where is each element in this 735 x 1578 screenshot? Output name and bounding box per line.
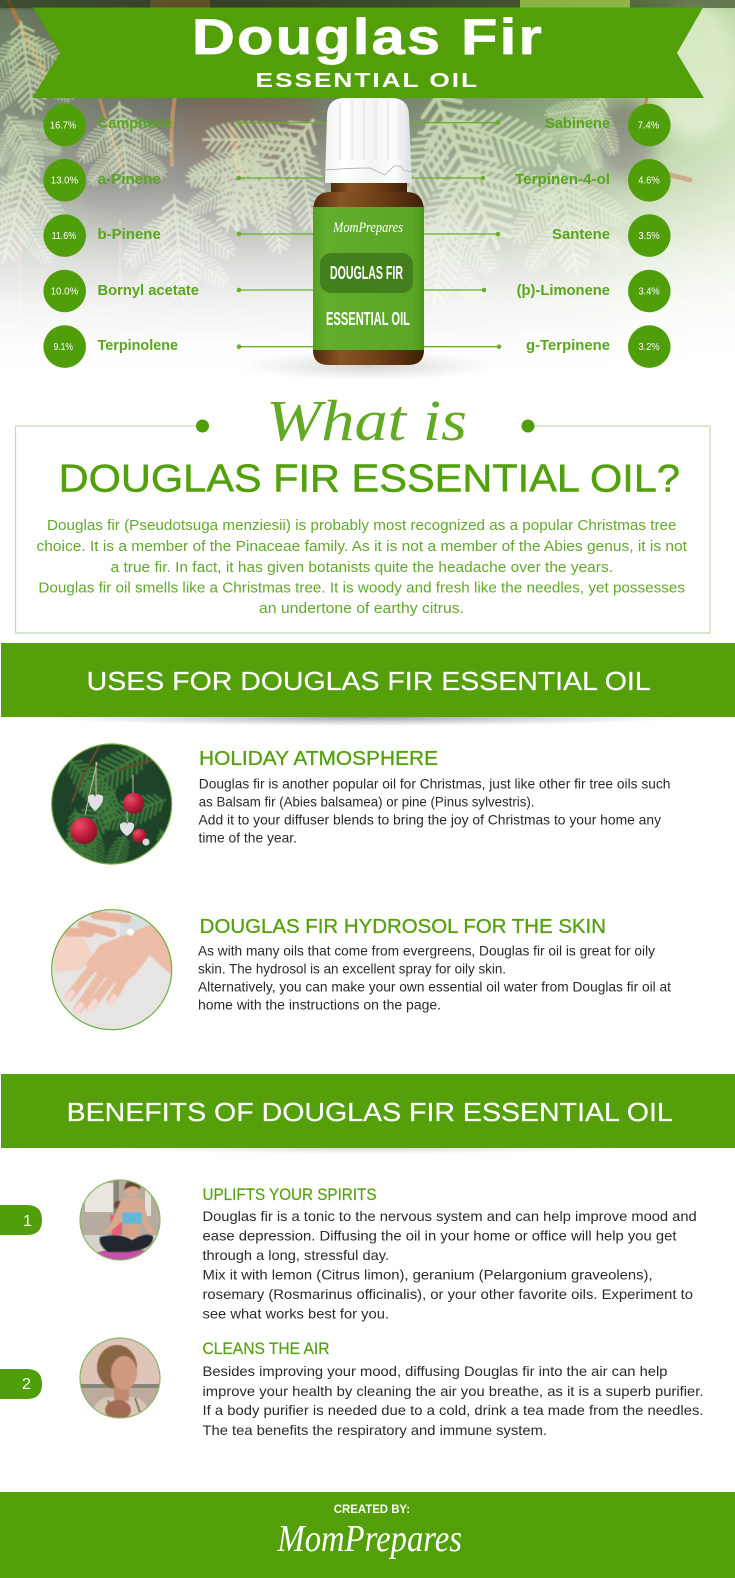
photo: christmas baubles on fir bbox=[52, 744, 172, 864]
text: hydrosol: skin. The hydrosol is an excellent spray for oily skin. bbox=[198, 961, 506, 977]
text: holiday atmosphere bbox=[198, 775, 670, 845]
left compounds list: 9.1% bbox=[54, 341, 73, 353]
number tab 2: 2 bbox=[22, 1376, 31, 1393]
intro paragraph: a true fir. In fact, it has given botanists quite the headache over the years. bbox=[111, 559, 613, 576]
text: uplifts your spirits bbox=[202, 1208, 697, 1322]
text: holiday atmosphere: Douglas fir is another popular oil for Christmas, just like other fir tree oils such bbox=[199, 775, 670, 791]
bottle label: Essential Oil: ESSENTIAL OIL bbox=[326, 308, 410, 329]
text: uplifts your spirits: rosemary (Rosmarinus officinalis), or your other favorite oils. Experiment to bbox=[202, 1286, 693, 1302]
photo ring: christmas bbox=[52, 744, 172, 864]
right compounds list: 3.4% bbox=[638, 286, 660, 298]
text: cleans the air: The tea benefits the respiratory and immune system. bbox=[202, 1422, 547, 1438]
right compounds list: 4.6% bbox=[638, 174, 660, 186]
heading: Douglas Fir Essential Oil?: DOUGLAS FIR ESSENTIAL OIL? bbox=[59, 458, 680, 501]
bottle cap bbox=[325, 98, 412, 183]
number tab 2 bbox=[0, 1369, 42, 1399]
photo ring: woman bbox=[80, 1338, 160, 1418]
background photo: fir branches fading to white bbox=[0, 0, 735, 328]
intro paragraph: an undertone of earthy citrus. bbox=[259, 600, 464, 617]
text: hydrosol: home with the instructions on the page. bbox=[198, 997, 441, 1013]
footer: created by: CREATED BY: bbox=[334, 1502, 410, 1516]
right connector lines bbox=[405, 120, 501, 349]
photo: woman breathing bbox=[80, 1338, 160, 1418]
right compounds list: Santene bbox=[552, 226, 610, 243]
essential oil bottle bbox=[313, 98, 424, 365]
right compounds list: 3.2% bbox=[638, 341, 660, 353]
bottle shadow bbox=[238, 351, 498, 381]
text: uplifts your spirits: Douglas fir is a tonic to the nervous system and can help improve mood and bbox=[202, 1208, 697, 1224]
text: hydrosol: As with many oils that come from evergreens, Douglas fir oil is great for oily bbox=[198, 943, 655, 959]
heading: cleans the air: CLEANS THE AIR bbox=[202, 1340, 330, 1358]
intro paragraph: Douglas fir (Pseudotsuga menziesii) is probably most recognized as a popular Christmas tree bbox=[47, 517, 676, 534]
text: cleans the air: Besides improving your mood, diffusing Douglas fir into the air can help bbox=[202, 1363, 668, 1379]
intro paragraph: Douglas fir oil smells like a Christmas tree. It is woody and fresh like the needles, yet possesses bbox=[38, 580, 685, 596]
section band: uses: USES FOR DOUGLAS FIR ESSENTIAL OIL bbox=[87, 668, 651, 696]
left compounds list bbox=[43, 104, 199, 368]
right compounds list: Terpinen-4-ol bbox=[515, 171, 610, 188]
heading: uplifts your spirits: UPLIFTS YOUR SPIRITS bbox=[202, 1186, 376, 1204]
photo: yoga meditation bbox=[80, 1180, 160, 1260]
number tab 1 bbox=[0, 1205, 42, 1235]
right compounds list: 3.5% bbox=[638, 230, 660, 242]
bottle label: brand: MomPrepares bbox=[332, 220, 403, 236]
text: holiday atmosphere: time of the year. bbox=[198, 829, 297, 845]
band shadow: benefits bbox=[97, 1142, 637, 1154]
text: holiday atmosphere: Add it to your diffuser blends to bring the joy of Christmas to your home any bbox=[198, 811, 661, 827]
left compounds list: 16.7% bbox=[50, 120, 76, 132]
photo ring: yoga bbox=[80, 1180, 160, 1260]
what-is box frame bbox=[16, 420, 710, 633]
subtitle: Essential Oil: ESSENTIAL OIL bbox=[256, 70, 479, 92]
text: uplifts your spirits: ease depression. Diffusing the oil in your home or office will help you get bbox=[202, 1228, 677, 1244]
top ribbon banner bbox=[32, 8, 704, 98]
left compounds list: 10.0% bbox=[51, 286, 78, 298]
band shadow: uses bbox=[42, 708, 692, 726]
photo: hands applying cream bbox=[50, 908, 176, 1032]
text: uplifts your spirits: Mix it with lemon (Citrus limon), geranium (Pelargonium graveolens), bbox=[202, 1266, 653, 1282]
bottle label: Douglas Fir plate bbox=[320, 253, 413, 293]
text: hydrosol: Alternatively, you can make your own essential oil water from Douglas fir oil at bbox=[198, 979, 671, 995]
left connector lines bbox=[237, 120, 330, 349]
left compounds list: a-Pinene bbox=[98, 171, 161, 188]
text: holiday atmosphere: as Balsam fir (Abies balsamea) or pine (Pinus sylvestris). bbox=[199, 793, 535, 809]
brown stems bbox=[8, 0, 690, 330]
text: cleans the air: improve your health by cleaning the air you breathe, as it is a superb purifier. bbox=[202, 1383, 704, 1399]
right compounds list: g-Terpinene bbox=[526, 337, 610, 354]
section band: benefits bbox=[1, 1074, 735, 1148]
footer band bbox=[0, 1492, 735, 1578]
right compounds list: (þ)-Limonene bbox=[517, 282, 610, 299]
intro paragraph bbox=[36, 517, 688, 617]
left compounds list: b-Pinene bbox=[98, 226, 161, 243]
text: uplifts your spirits: see what works best for you. bbox=[202, 1306, 389, 1322]
bottle label: Douglas Fir plate: DOUGLAS FIR bbox=[330, 263, 403, 283]
left compounds list: 11.6% bbox=[52, 230, 76, 242]
section band: uses bbox=[1, 643, 735, 717]
intro paragraph: choice. It is a member of the Pinaceae family. As it is not a member of the Abies genus, it is not bbox=[36, 538, 688, 555]
footer: brand name: MomPrepares bbox=[277, 1518, 462, 1560]
text: hydrosol bbox=[198, 943, 671, 1013]
photo ring: hands bbox=[52, 910, 172, 1030]
left compounds list: Camphene bbox=[98, 115, 172, 132]
heading: hydrosol: DOUGLAS FIR HYDROSOL FOR THE SKIN bbox=[200, 916, 606, 938]
script heading: What is: What is bbox=[266, 388, 467, 453]
title: Douglas Fir: Douglas Fir bbox=[192, 9, 544, 65]
right compounds list: Sabinene bbox=[545, 115, 610, 132]
text: cleans the air: If a body purifier is needed due to a cold, drink a tea made from the needles. bbox=[202, 1402, 704, 1418]
left compounds list: Bornyl acetate bbox=[98, 282, 199, 299]
right compounds list: 7.4% bbox=[638, 120, 659, 132]
left compounds list: 13.0% bbox=[51, 174, 78, 186]
text: uplifts your spirits: through a long, stressful day. bbox=[202, 1247, 389, 1263]
text: cleans the air bbox=[202, 1363, 704, 1438]
left compounds list: Terpinolene bbox=[98, 337, 178, 354]
right compounds list bbox=[515, 104, 671, 368]
heading: holiday atmosphere: HOLIDAY ATMOSPHERE bbox=[199, 748, 438, 770]
number tab 1: 1 bbox=[23, 1213, 32, 1230]
section band: benefits: BENEFITS OF DOUGLAS FIR ESSENTIAL OIL bbox=[67, 1099, 673, 1127]
